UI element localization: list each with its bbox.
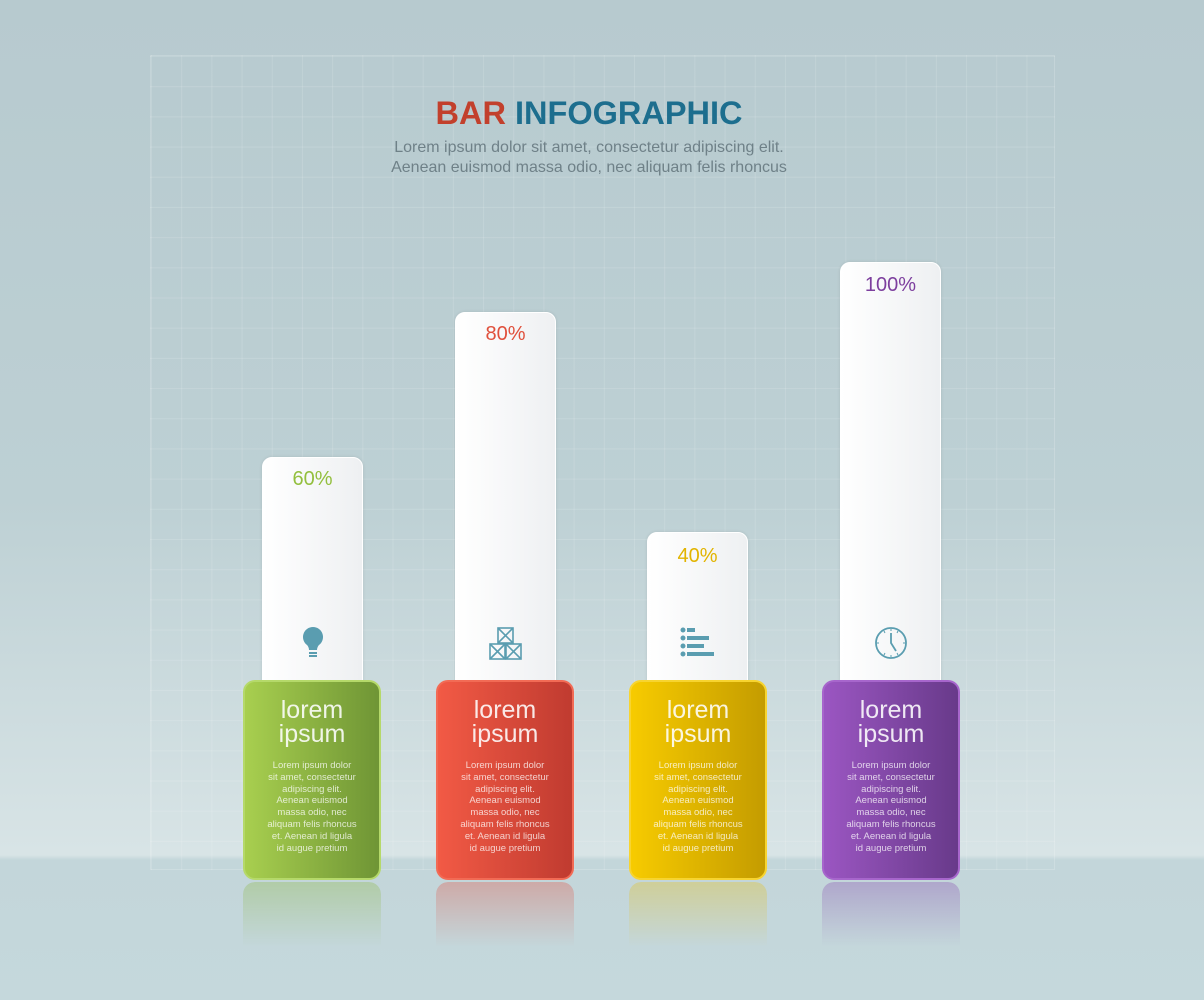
bar 2 [455, 312, 556, 687]
card red: et. Aenean id ligula [465, 831, 545, 842]
card purple: aliquam felis rhoncus [846, 819, 936, 830]
card yellow [629, 680, 767, 880]
card green: lorem [281, 696, 343, 724]
card red: ipsum [472, 720, 538, 748]
icon: clock [875, 627, 907, 659]
card green: Lorem ipsum dolor [273, 760, 351, 771]
subtitle: Lorem ipsum dolor sit amet, consectetur adipiscing elit. [394, 139, 784, 156]
subtitle [391, 139, 787, 176]
bar 1 [262, 457, 363, 687]
card red: aliquam felis rhoncus [460, 819, 550, 830]
card red: adipiscing elit. [475, 784, 535, 795]
card green [243, 680, 381, 880]
card purple: sit amet, consectetur [847, 772, 935, 783]
pct 80: 80% [485, 323, 526, 345]
card purple [822, 680, 960, 880]
card purple: Lorem ipsum dolor [852, 760, 930, 771]
card green: massa odio, nec [277, 807, 347, 818]
card red: Aenean euismod [469, 795, 541, 806]
card purple: massa odio, nec [856, 807, 926, 818]
card purple: lorem [860, 696, 922, 724]
card yellow: sit amet, consectetur [654, 772, 742, 783]
pct 100: 100% [865, 274, 916, 296]
card yellow: Aenean euismod [662, 795, 734, 806]
pct 40: 40% [677, 545, 718, 567]
card green: id augue pretium [277, 843, 347, 854]
bar 4 [840, 262, 941, 687]
card red: massa odio, nec [470, 807, 540, 818]
card green: ipsum [279, 720, 345, 748]
card yellow: Lorem ipsum dolor [659, 760, 737, 771]
card red: id augue pretium [470, 843, 540, 854]
icon: list [680, 628, 714, 656]
icon: bulb [303, 627, 323, 657]
card green: aliquam felis rhoncus [267, 819, 357, 830]
bar 3 [647, 532, 748, 687]
card red: Lorem ipsum dolor [466, 760, 544, 771]
card yellow: massa odio, nec [663, 807, 733, 818]
card yellow: ipsum [665, 720, 731, 748]
card yellow: lorem [667, 696, 729, 724]
card red: lorem [474, 696, 536, 724]
card yellow: aliquam felis rhoncus [653, 819, 743, 830]
card purple: ipsum [858, 720, 924, 748]
card green: sit amet, consectetur [268, 772, 356, 783]
card purple: Aenean euismod [855, 795, 927, 806]
card yellow: id augue pretium [663, 843, 733, 854]
title: BAR INFOGRAPHIC [436, 95, 742, 131]
card green: adipiscing elit. [282, 784, 342, 795]
card purple: adipiscing elit. [861, 784, 921, 795]
reflections [243, 882, 960, 939]
card yellow: et. Aenean id ligula [658, 831, 738, 842]
card red: sit amet, consectetur [461, 772, 549, 783]
card red [436, 680, 574, 880]
card green: Aenean euismod [276, 795, 348, 806]
subtitle: Aenean euismod massa odio, nec aliquam felis rhoncus [391, 159, 787, 176]
card green: et. Aenean id ligula [272, 831, 352, 842]
card purple: et. Aenean id ligula [851, 831, 931, 842]
pct 60: 60% [292, 468, 333, 490]
icon: boxes [489, 627, 522, 660]
card purple: id augue pretium [856, 843, 926, 854]
card yellow: adipiscing elit. [668, 784, 728, 795]
